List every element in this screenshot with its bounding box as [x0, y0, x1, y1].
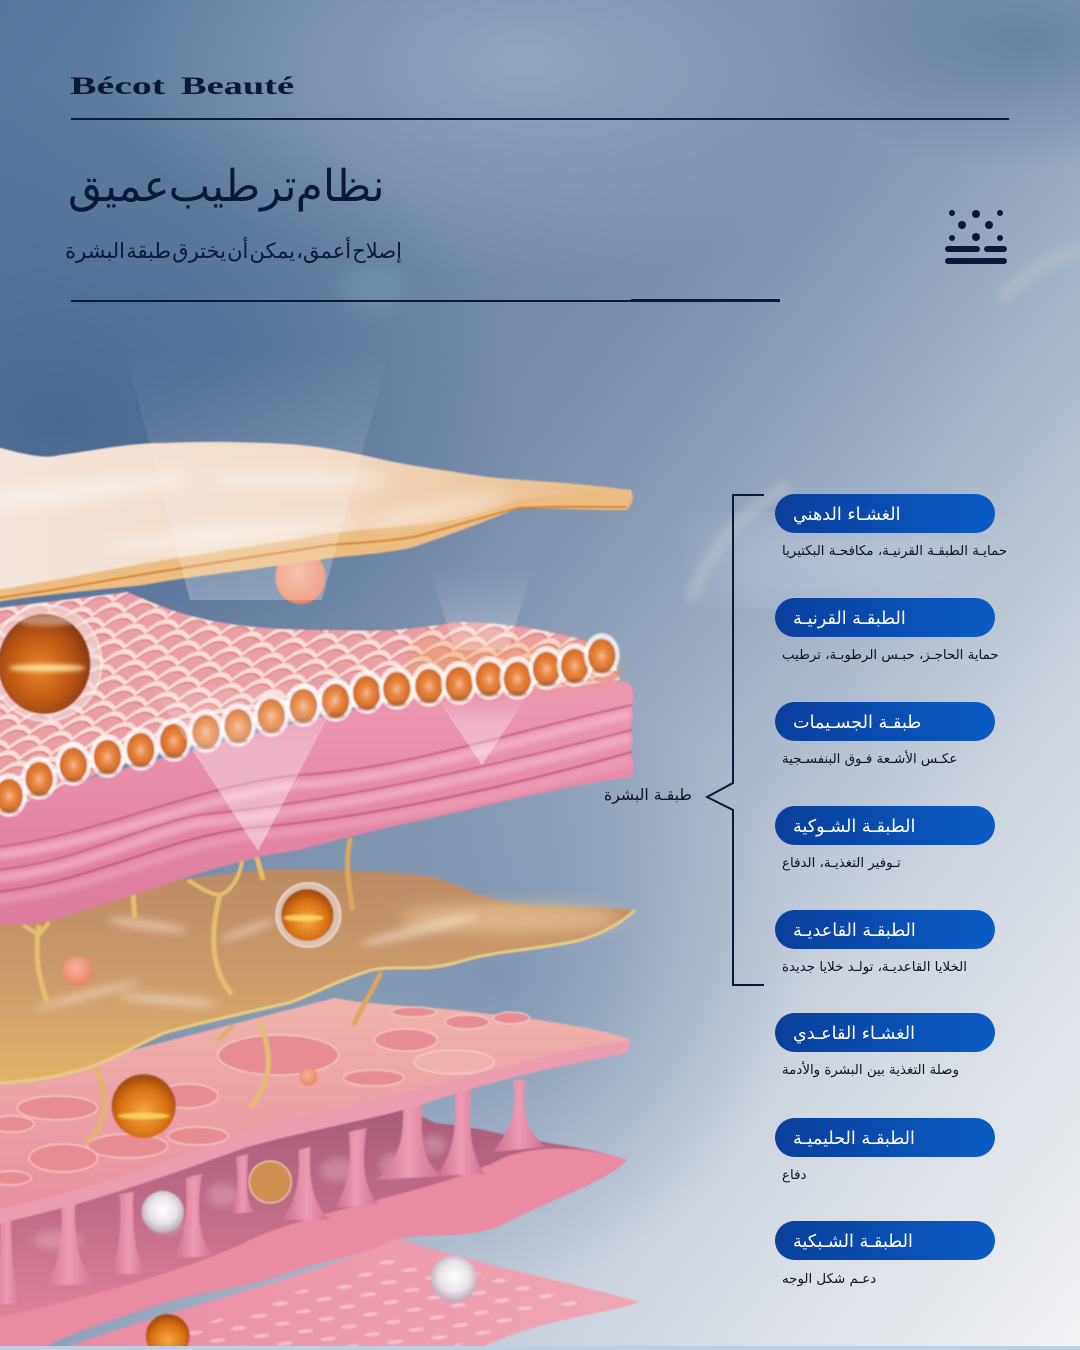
pill: reticular [775, 1221, 995, 1260]
ball: amber lower [146, 1314, 190, 1350]
pill: basal [775, 910, 995, 949]
large serum bubble [0, 605, 101, 721]
description: حماية الحاجـز، حبـس الرطوبـة، ترطيب [782, 648, 999, 663]
pill: lipid film [775, 494, 995, 533]
pill: lipid film: الغشـاء الدهني [793, 505, 901, 525]
pill: reticular: الطبقـة الشـبكية [793, 1232, 913, 1252]
pill: basement membrane: الغشـاء القاعـدي [793, 1024, 915, 1044]
pill: basal: الطبقـة القاعديـة [793, 921, 916, 941]
pill: stratum corneum: الطبقـة القرنيـة [793, 609, 906, 629]
subtitle rule [71, 299, 780, 302]
header rule [71, 118, 1009, 120]
peach ball between layers [275, 550, 326, 604]
layer: stratum corneum bead sheet [0, 592, 620, 817]
layer: reticular [57, 1238, 640, 1350]
penetration beams [138, 396, 525, 851]
pill: papillary [775, 1118, 995, 1157]
brand name: Beauté [181, 73, 294, 100]
pill: spinous [775, 806, 995, 845]
bracket [705, 494, 764, 986]
description: حمايـة الطبقـة القرنيـة، مكافحـة البكتيريا [782, 544, 1007, 559]
description: دفاع [782, 1168, 806, 1183]
title: نظام ترطيب عميق [68, 161, 385, 212]
layer: stratum lucidum pink folds [0, 682, 634, 925]
layer: lipid film [0, 442, 633, 602]
pill: papillary: الطبقـة الحليميـة [793, 1129, 915, 1149]
layer: spinous and basal tan sheet [0, 838, 635, 1083]
brand name [70, 73, 294, 100]
description: دعـم شكل الوجه [782, 1272, 876, 1287]
layer: basement membrane [0, 972, 631, 1224]
pill: stratum corneum [775, 598, 995, 637]
pill: spinous: الطبقـة الشـوكية [793, 817, 915, 837]
description: عكـس الأشـعة فـوق البنفسـجية [782, 752, 957, 767]
description: الخلايا القاعديـة، تولـد خلايا جديدة [782, 960, 967, 975]
skin layers illustration [0, 396, 1080, 1350]
pill: granular: طبقـة الجسـيمات [793, 713, 921, 733]
subtitle: إصلاح أعمق، يمكن أن يخترق طبقة البشرة [65, 239, 402, 263]
layer: papillary with pillars [0, 1080, 627, 1350]
description: تـوفير التغذيـة، الدفاع [782, 856, 901, 871]
page bottom strip [0, 1346, 1080, 1350]
description: وصلة التغذية بين البشرة والأدمة [782, 1063, 959, 1078]
epidermis label: طبقـة البشرة [604, 785, 692, 804]
pill: granular [775, 702, 995, 741]
pill: basement membrane [775, 1013, 995, 1052]
brand name: Bécot [70, 73, 166, 100]
front row beads [0, 633, 620, 817]
icon: moisture dots [945, 210, 1007, 264]
